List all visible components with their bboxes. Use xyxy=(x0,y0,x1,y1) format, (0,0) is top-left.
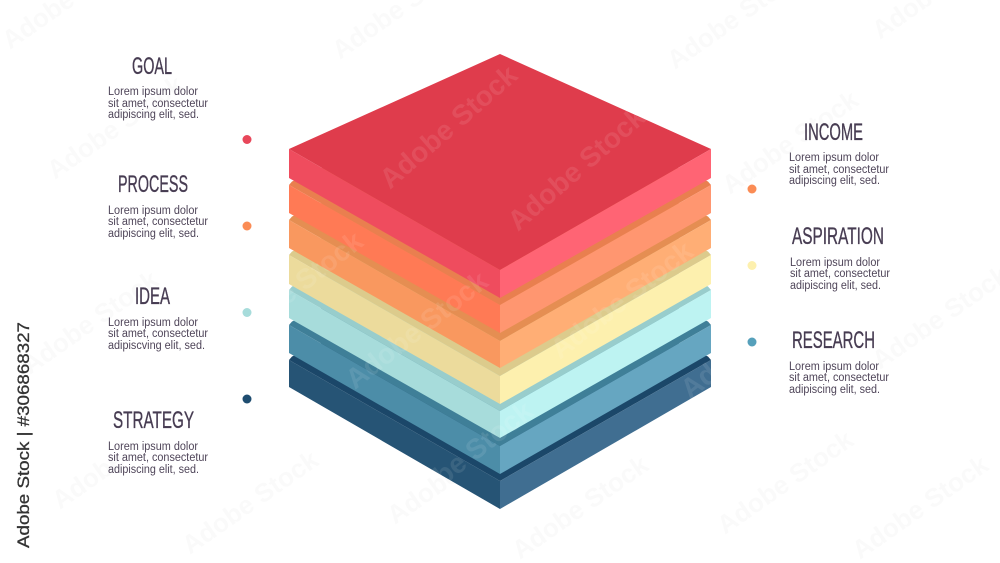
label: strategy xyxy=(108,407,208,476)
layer 6: blue xyxy=(289,228,711,474)
cube watermarks: Adobe Stock xyxy=(215,225,369,355)
layered cube xyxy=(289,54,711,509)
label: research: RESEARCH xyxy=(792,327,875,354)
label: aspiration: adipiscing elit, sed. xyxy=(790,280,881,292)
dot: income xyxy=(748,184,756,194)
label: process: adipiscing elit, sed. xyxy=(108,228,199,240)
cube watermarks: Adobe Stock xyxy=(340,265,494,395)
label: research xyxy=(789,327,889,396)
label: income: adipiscing elit, sed. xyxy=(789,175,880,187)
layer 2: orange xyxy=(289,87,711,333)
label: goal: GOAL xyxy=(132,53,172,80)
label: goal xyxy=(108,53,208,121)
background watermarks: Adobe Stock xyxy=(381,414,529,530)
dot: strategy xyxy=(242,394,252,404)
cube watermarks: Adobe Stock xyxy=(374,59,523,195)
label: goal: sit amet, consectetur xyxy=(108,98,208,110)
cube watermarks: Adobe xyxy=(675,327,762,405)
background watermarks: Adobe xyxy=(46,444,130,515)
label: strategy: STRATEGY xyxy=(113,407,194,434)
cube watermarks: Adobe Stock xyxy=(545,235,699,365)
layer 4: yellow xyxy=(289,157,711,404)
label: goal: adipiscing elit, sed. xyxy=(108,109,199,121)
label: income: sit amet, consectetur xyxy=(789,164,889,176)
background watermarks: Adobe Stock xyxy=(16,264,164,380)
label: process xyxy=(108,171,208,240)
background watermarks: Adobe Stock xyxy=(506,449,654,563)
label: aspiration: sit amet, consectetur xyxy=(790,268,890,280)
background watermarks: Adobe Stock xyxy=(711,424,859,540)
layer 1: red top xyxy=(289,54,711,298)
cube watermarks: Adobe Stock xyxy=(385,395,539,525)
label: process: PROCESS xyxy=(118,171,188,198)
dot: research xyxy=(748,338,756,346)
cube watermarks: Adobe Stock xyxy=(502,101,651,237)
label: aspiration: Lorem ipsum dolor xyxy=(790,257,880,269)
background watermarks: Adobe Stock xyxy=(846,449,994,563)
label: goal: Lorem ipsum dolor xyxy=(108,86,198,98)
label: income: INCOME xyxy=(804,119,863,146)
label: strategy: Lorem ipsum dolor xyxy=(108,441,198,453)
layer 5: light teal xyxy=(289,193,711,438)
label: research: sit amet, consectetur xyxy=(789,372,889,384)
label: process: Lorem ipsum dolor xyxy=(108,205,198,217)
label: income: Lorem ipsum dolor xyxy=(789,152,879,164)
dot: aspiration xyxy=(748,261,756,270)
stock id caption: Adobe Stock | #306868327 xyxy=(14,322,33,548)
label: aspiration xyxy=(790,223,890,292)
cube watermarks xyxy=(215,59,762,525)
background watermarks: Adobe Stock xyxy=(716,84,864,200)
label: idea: sit amet, consectetur xyxy=(108,328,208,340)
layer 7: navy xyxy=(289,262,711,509)
dot: goal xyxy=(242,135,252,144)
background watermarks: Adobe Stock xyxy=(176,444,324,560)
label: strategy: sit amet, consectetur xyxy=(108,452,208,464)
label: strategy: adipiscing elit, sed. xyxy=(108,464,199,476)
layer 3: light orange xyxy=(289,122,711,368)
label: research: Lorem ipsum dolor xyxy=(789,361,879,373)
background watermarks: Adobe Stock xyxy=(41,69,189,185)
dot: process xyxy=(242,222,252,230)
label: idea: IDEA xyxy=(135,283,170,310)
label: idea: Lorem ipsum dolor xyxy=(108,317,198,329)
label: process: sit amet, consectetur xyxy=(108,216,208,228)
label: aspiration: ASPIRATION xyxy=(792,223,884,250)
dot: idea xyxy=(242,308,252,317)
label: idea xyxy=(108,283,208,352)
label: research: adipiscing elit, sed. xyxy=(789,384,880,396)
label: idea: adipiscving elit, sed. xyxy=(108,340,205,352)
label: income xyxy=(789,119,889,187)
